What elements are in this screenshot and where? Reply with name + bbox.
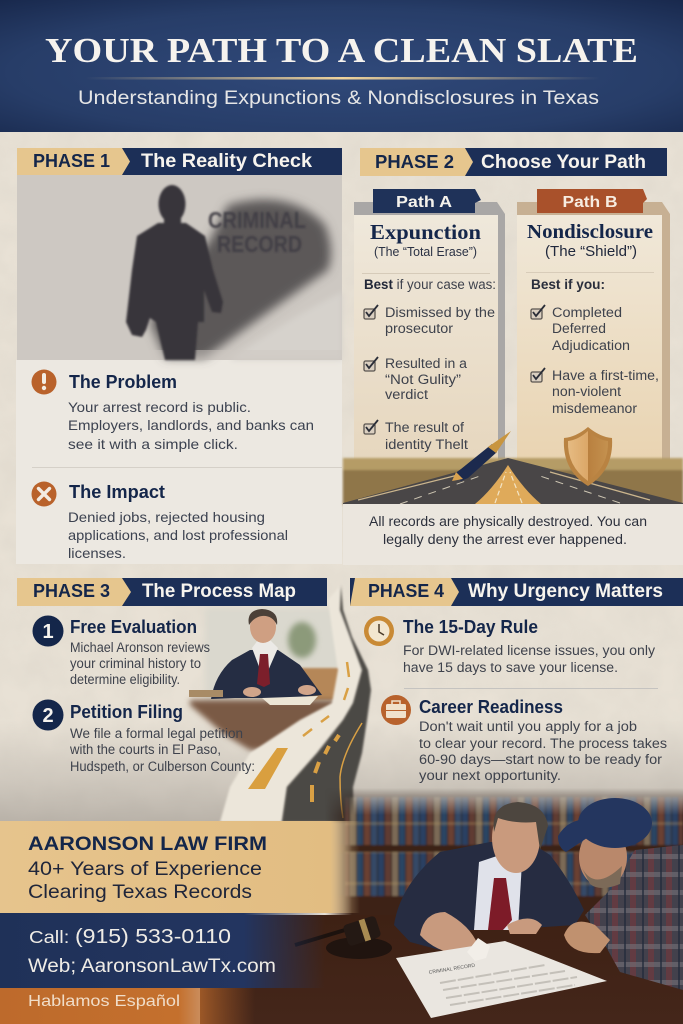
icon: clock — [364, 616, 394, 646]
attorney — [394, 802, 584, 955]
checklist A: verdict — [385, 387, 428, 402]
step 2: petition filing: Hudspeth, or Culberson County: — [70, 759, 255, 774]
lower gray haze — [0, 720, 683, 821]
firm name band: 40+ Years of Experience — [28, 858, 262, 880]
number badge 2: 2 — [42, 705, 54, 727]
criminal record stamp text: CRIMINAL — [208, 207, 306, 233]
checklist B: Adjudication — [552, 338, 630, 353]
number badge 1 — [32, 616, 64, 646]
subtitle: Understanding Expunctions & Nondisclosures in Texas — [78, 88, 599, 109]
item: the problem: The Problem — [69, 372, 177, 392]
checklist A: “Not Gulity” — [385, 372, 461, 387]
tab: path A: Path A — [396, 194, 452, 211]
gavel — [295, 915, 392, 959]
banner: phase 3: PHASE 3 — [33, 581, 110, 601]
checklist B: Completed — [552, 305, 622, 320]
checklist B: non-violent — [552, 384, 621, 399]
contact band: Web; AaronsonLawTx.com — [28, 956, 276, 977]
road caption panel — [343, 504, 683, 565]
photo: attorney and client at table — [200, 785, 683, 1024]
tab: path A — [373, 189, 481, 213]
illustration: silhouette and criminal record — [17, 175, 342, 360]
step 1: free evaluation: determine eligibility. — [70, 672, 180, 687]
banner: phase 2 — [360, 148, 667, 176]
checklist B: Deferred — [552, 321, 606, 336]
icon: exclamation — [32, 370, 56, 394]
item: the problem: see it with a simple click. — [68, 436, 238, 452]
card: path A expunction: Best if your case was: — [364, 277, 496, 292]
checklist A: Resulted in a — [385, 356, 467, 371]
item: the 15-day rule — [364, 616, 655, 675]
item: the impact: The Impact — [69, 482, 165, 502]
banner: phase 1: PHASE 1 — [33, 151, 110, 171]
item: the impact: licenses. — [68, 545, 126, 561]
bookshelf background — [326, 790, 683, 915]
banner: phase 4 — [350, 578, 683, 606]
banner: phase 3: The Process Map — [142, 581, 296, 602]
checklist A: identity Thelt — [385, 437, 468, 452]
item: career readiness: to clear your record. The process takes — [419, 736, 667, 751]
firm name band: AARONSON LAW FIRM — [28, 834, 267, 855]
criminal record stamp text: RECORD — [217, 231, 302, 257]
criminal record stamp text — [208, 207, 306, 257]
item: career readiness: 60-90 days—start now to be ready for — [419, 752, 663, 767]
number badge 1: 1 — [42, 621, 54, 643]
item: career readiness: Career Readiness — [419, 697, 563, 717]
icon: shield — [564, 427, 612, 486]
card: path B nondisclosure — [517, 189, 670, 470]
panel: phase 1 — [16, 148, 342, 564]
item: the problem: Employers, landlords, and banks can — [68, 417, 314, 433]
criminal record document — [396, 941, 607, 1018]
step 2: petition filing: We file a formal legal petition — [70, 726, 243, 741]
panel: phase 3 — [17, 578, 371, 822]
item: the problem — [32, 370, 314, 452]
step 2: petition filing — [32, 700, 255, 774]
card: path B nondisclosure: Nondisclosure — [527, 221, 653, 243]
contact block — [0, 821, 360, 1024]
client in plaid shirt and cap — [558, 798, 683, 990]
banner: phase 3 — [17, 578, 327, 606]
checklist A — [364, 305, 495, 452]
tab: path B: Path B — [562, 194, 618, 211]
phase 1 text panel background — [16, 360, 342, 564]
card: path A expunction: Expunction — [370, 220, 481, 244]
item: career readiness: your next opportunity. — [419, 768, 561, 783]
criminal record document: CRIMINAL RECORD — [428, 963, 476, 976]
banner: phase 2: Choose Your Path — [481, 152, 646, 173]
banner: phase 4: Why Urgency Matters — [468, 581, 663, 602]
paper mottled texture — [0, 132, 683, 822]
step 1: free evaluation — [32, 616, 210, 687]
checklist A: Dismissed by the — [385, 305, 495, 320]
title: YOUR PATH TO A CLEAN SLATE — [45, 31, 638, 70]
item: the impact: Denied jobs, rejected housing — [68, 509, 265, 525]
road illustration — [343, 458, 683, 505]
firm name band — [0, 821, 360, 913]
language band: Hablamos Español — [28, 993, 180, 1010]
item: the impact — [32, 482, 288, 561]
card: path A expunction: (The “Total Erase”) — [374, 245, 477, 259]
firm name band: Clearing Texas Records — [28, 881, 252, 903]
road caption panel: legally deny the arrest ever happened. — [383, 532, 627, 547]
card: path B nondisclosure: (The “Shield”) — [545, 244, 637, 260]
item: career readiness: Don't wait until you apply for a job — [419, 719, 637, 734]
step 1: free evaluation: Michael Aronson reviews — [70, 640, 210, 655]
winding road — [220, 585, 371, 822]
checklist A: The result of — [385, 420, 464, 435]
eraser — [467, 938, 490, 961]
banner: phase 1: The Reality Check — [141, 151, 312, 172]
checklist B — [531, 305, 659, 416]
item: the 15-day rule: The 15-Day Rule — [403, 617, 538, 637]
icon: fountain pen — [452, 431, 511, 481]
checklist B: misdemeanor — [552, 401, 638, 416]
checklist A: prosecutor — [385, 321, 454, 336]
item: the 15-day rule: have 15 days to save your license. — [403, 660, 618, 675]
language band — [0, 988, 255, 1024]
icon: x mark — [32, 482, 56, 506]
header band — [0, 0, 683, 132]
card: path A expunction — [354, 189, 505, 470]
number badge 2 — [32, 700, 64, 730]
step 1: free evaluation: your criminal history to — [70, 656, 201, 671]
icon: briefcase — [381, 695, 411, 725]
banner: phase 2: PHASE 2 — [375, 152, 454, 172]
banner: phase 1 — [17, 148, 342, 175]
panel: phase 2 — [343, 148, 683, 565]
road caption panel: All records are physically destroyed. You can — [369, 514, 647, 529]
item: the impact: applications, and lost professional — [68, 527, 288, 543]
contact band — [0, 913, 325, 988]
lawyer at desk illustration — [189, 608, 340, 750]
step 1: free evaluation: Free Evaluation — [70, 617, 197, 637]
step 2: petition filing: with the courts in El Paso, — [69, 742, 221, 757]
tab: path B — [537, 189, 647, 213]
step 2: petition filing: Petition Filing — [70, 702, 183, 722]
item: the problem: Your arrest record is public. — [68, 399, 251, 415]
item: the 15-day rule: For DWI-related license issues, you only — [403, 643, 655, 658]
panel: phase 4 — [350, 578, 683, 783]
card: path B nondisclosure: Best if you: — [531, 277, 605, 292]
item: career readiness — [381, 695, 667, 783]
contact band: Call: (915) 533-0110 — [29, 926, 231, 948]
checklist B: Have a first-time, — [552, 368, 659, 383]
banner: phase 4: PHASE 4 — [368, 581, 444, 601]
